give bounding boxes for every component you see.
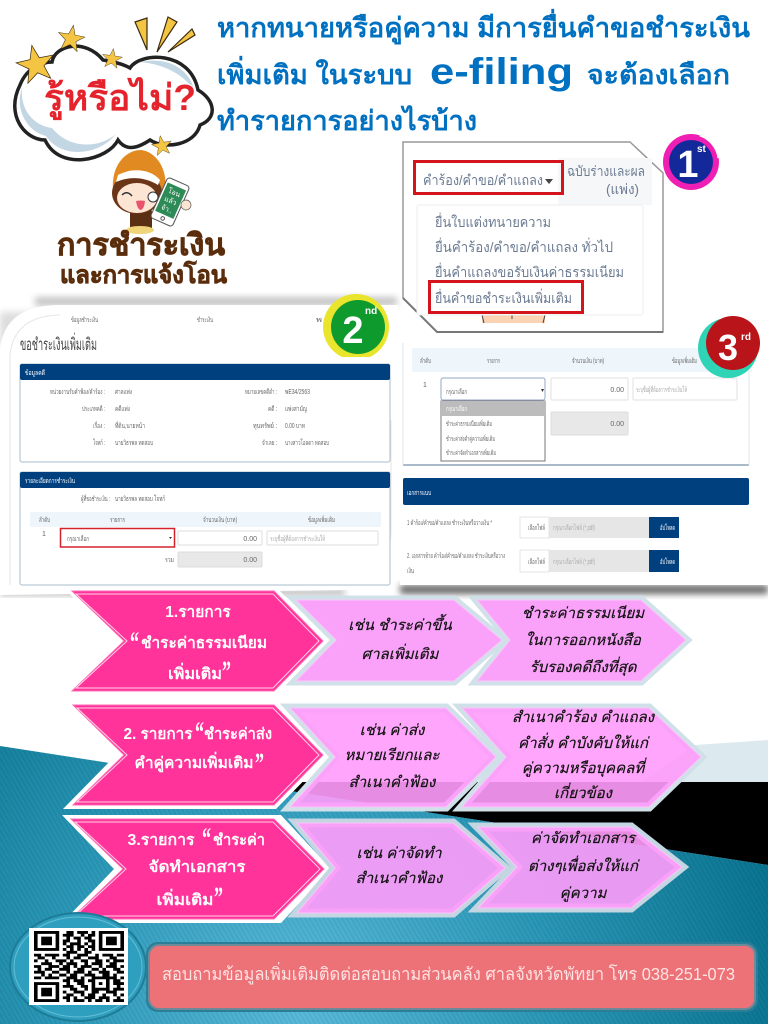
arrow row 2: ชำระค่าส่ง bbox=[204, 725, 272, 743]
icon: step 1 badge: 1 bbox=[677, 144, 699, 186]
arrow row 3: เช่น ค่าจัดทำ bbox=[356, 845, 442, 862]
callout: contact information: สอบถามข้อมูลเพิ่มเติมติดต่อสอบถามส่วนคลัง ศาลจังหวัดพัทยา โทร 038-251-073 bbox=[162, 962, 735, 985]
panel: step 2 form screenshot: ที่ดิน,นายหน้า bbox=[115, 421, 145, 430]
icon: step 2 badge bbox=[323, 294, 389, 360]
arrow row 3 bbox=[62, 815, 682, 923]
arrow row 3: ” bbox=[214, 881, 223, 914]
panel: step 3 form screenshot: กรุณาเลือกไฟล์ (*.pdf) bbox=[553, 523, 595, 532]
heading: payment and transfer notice bbox=[57, 229, 228, 289]
arrow row 1: ศาลเพิ่มเติม bbox=[362, 643, 440, 663]
panel: step 2 form screenshot: ประเภทคดี : bbox=[82, 405, 105, 413]
panel: step 3 form screenshot bbox=[400, 343, 768, 585]
arrow row 3: ค่าจัดทำเอกสาร bbox=[531, 830, 637, 847]
arrow row 2: 2. รายการ bbox=[124, 726, 193, 743]
arrow row 1: ” bbox=[222, 655, 231, 688]
panel: step 2 form screenshot bbox=[0, 305, 398, 595]
panel: step 1 menu screenshot: คำร้อง/คำขอ/คำแถลง bbox=[423, 172, 543, 188]
badge: did you know cloud: รู้หรือไม่? bbox=[44, 76, 196, 121]
arrow row 2: คำสั่ง คำบังคับให้แก่ bbox=[518, 732, 650, 752]
panel: step 2 form screenshot: คดี : bbox=[268, 405, 277, 413]
icon: step 2 badge: nd bbox=[365, 306, 377, 317]
arrow row 2: คู่ความหรือบุคคลที่ bbox=[522, 757, 647, 777]
arrow row 3: คู่ความ bbox=[560, 885, 608, 902]
arrow row 3: “ bbox=[202, 822, 211, 855]
arrow row 3: สำเนาคำฟ้อง bbox=[356, 870, 444, 887]
title: question heading: e-filing bbox=[430, 51, 573, 92]
panel: step 3 form screenshot: 0.00 bbox=[610, 387, 624, 394]
panel: step 2 form screenshot: แพ่งสามัญ bbox=[285, 405, 307, 413]
panel: step 2 form screenshot: ศาลแพ่ง bbox=[115, 389, 132, 396]
arrow row 2: ” bbox=[255, 747, 264, 780]
panel: step 3 form screenshot: เอกสารแนบ bbox=[407, 490, 431, 497]
panel: step 3 form screenshot: ลำดับ bbox=[420, 357, 431, 365]
panel: step 3 form screenshot: กรุณาเลือก bbox=[446, 388, 467, 396]
panel: step 2 form screenshot: นายวิธรพล ทดสอบ bbox=[115, 439, 153, 447]
panel: step 2 form screenshot: ลำดับ bbox=[39, 516, 50, 524]
panel: step 2 form screenshot: รวม bbox=[165, 557, 174, 564]
panel: step 3 form screenshot: อัปโหลด bbox=[660, 557, 675, 566]
icon: cartoon girl holding phone: โอน bbox=[167, 186, 182, 199]
icon: step 2 badge: 2 bbox=[342, 310, 364, 352]
panel: step 2 form screenshot: คดีแพ่ง bbox=[115, 405, 130, 413]
panel: step 1 menu screenshot: ยื่นคำขอชำระเงินเพิ่มเติม bbox=[435, 289, 572, 306]
panel: step 2 form screenshot: 0.00 bbox=[243, 536, 257, 543]
panel: step 2 form screenshot: ระบุชื่อผู้ที่ต้องการชำระเงินให้ bbox=[270, 534, 325, 543]
panel: step 2 form screenshot: หน่วยงานรับคำฟ้อง/คำร้อง : bbox=[50, 388, 105, 396]
arrow row 1: ชำระค่าธรรมเนียม bbox=[141, 634, 267, 652]
arrow row 2: สำเนาคำฟ้อง bbox=[349, 774, 437, 791]
panel: step 3 form screenshot: ระบุชื่อผู้ที่ต้องการชำระเงินให้ bbox=[636, 385, 687, 394]
arrow row 3: จัดทำเอกสาร bbox=[148, 858, 246, 876]
arrow row 3: ต่างๆเพื่อส่งให้แก่ bbox=[528, 855, 640, 875]
arrow row 3: ชำระค่า bbox=[213, 831, 265, 849]
arrow row 1: “ bbox=[130, 626, 139, 659]
icon: cartoon girl holding phone: จ้า.. bbox=[160, 203, 174, 215]
panel: step 2 form screenshot: จำนวนเงิน (บาท) bbox=[203, 516, 237, 524]
icon: QR code in circle bbox=[10, 913, 146, 1021]
panel: step 2 form screenshot: นายวิธรพล ทดสอบ โจทก์ bbox=[115, 494, 165, 503]
panel: step 3 form screenshot: ชำระค่าส่งคำคู่ความเพิ่มเติม bbox=[446, 434, 495, 443]
panel shadow: screenshots bbox=[0, 297, 768, 595]
panel: step 2 form screenshot: กรุณาเลือก bbox=[67, 535, 89, 543]
panel: step 2 form screenshot: ผู้ที่ขอชำระเงิน : bbox=[81, 494, 110, 503]
panel: step 2 form screenshot: 0.00 บาท bbox=[285, 423, 305, 430]
panel: step 3 form screenshot: เงิน bbox=[407, 567, 414, 575]
callout: contact information bbox=[146, 942, 758, 1012]
panel: step 2 form screenshot: พ bbox=[316, 317, 322, 324]
title: question heading: เพิ่มเติม ในระบบ bbox=[217, 55, 412, 90]
arrow row 2: คำคู่ความเพิ่มเติม bbox=[134, 751, 254, 774]
panel: step 3 form screenshot: ชำระค่าจัดทำเอกสารเพิ่มเติม bbox=[446, 448, 496, 457]
panel: step 2 form screenshot: จำเลย : bbox=[262, 439, 277, 447]
panel: step 3 form screenshot: เลือกไฟล์ bbox=[528, 523, 545, 532]
panel: step 3 form screenshot: 1 bbox=[423, 382, 427, 389]
icon: step 3 badge: 3 bbox=[718, 327, 738, 368]
panel: step 2 form screenshot: 0.00 bbox=[243, 557, 257, 564]
arrow row 1: เช่น ชำระค่าขึ้น bbox=[348, 614, 452, 634]
panel: step 3 form screenshot: ชำระค่าธรรมเนียมเพิ่มเติม bbox=[446, 419, 492, 428]
panel: step 2 form screenshot: รายการ bbox=[110, 517, 125, 524]
panel: step 2 form screenshot: ทุนทรัพย์ : bbox=[253, 422, 277, 430]
panel: step 3 form screenshot: รายการ bbox=[487, 358, 500, 365]
arrow row 2: “ bbox=[195, 716, 204, 749]
arrow row 2: เกี่ยวข้อง bbox=[554, 782, 614, 802]
panel: step 3 form screenshot: จำนวนเงิน (บาท) bbox=[572, 357, 604, 365]
panel: step 2 form screenshot: ข้อมูลคดี bbox=[25, 369, 45, 377]
panel: step 2 form screenshot: 1 bbox=[42, 531, 46, 538]
arrow row 1 bbox=[63, 587, 686, 695]
panel: step 3 form screenshot: เลือกไฟล์ bbox=[528, 557, 545, 566]
arrow row 2: เช่น ค่าส่ง bbox=[360, 722, 426, 739]
panel: step 1 menu screenshot bbox=[403, 142, 663, 332]
panel: step 2 form screenshot: หมายเลขคดีดำ : bbox=[245, 388, 277, 396]
panel: step 2 form screenshot: ข้อมูลชำระเงิน bbox=[71, 316, 98, 324]
arrow row 3: เพิ่มเติม bbox=[156, 888, 214, 909]
panel: step 3 form screenshot: 0.00 bbox=[610, 421, 624, 428]
panel: step 1 menu screenshot: ยื่นใบแต่งทนายความ bbox=[435, 213, 551, 230]
title: question heading bbox=[217, 8, 751, 136]
arrow row 2: หมายเรียกและ bbox=[345, 747, 440, 764]
arrow row 1: รับรองคดีถึงที่สุด bbox=[530, 656, 638, 676]
panel: step 1 menu screenshot: ยื่นคำแถลงขอรับเงินค่าธรรมเนียม bbox=[435, 263, 624, 280]
arrow row 1: ชำระค่าธรรมเนียม bbox=[522, 605, 645, 622]
title: question heading: จะต้องเลือก bbox=[587, 60, 730, 90]
panel: step 1 menu screenshot: ยื่นคำร้อง/คำขอ/คำแถลง ทั่วไป bbox=[435, 238, 613, 255]
icon: step 1 badge bbox=[663, 134, 719, 190]
heading: payment and transfer notice: และการแจ้งโอน bbox=[60, 260, 228, 289]
icon: cartoon girl holding phone: แล้ว bbox=[163, 195, 178, 207]
title: question heading: หากทนายหรือคู่ความ มีการยื่นคำขอชำระเงิน bbox=[217, 8, 751, 45]
panel: step 2 form screenshot: พE34/2563 bbox=[285, 389, 310, 396]
panel: step 3 form screenshot: 2. เอกสารท้าย คำร้อง/คำขอ/คำแถลง ชำระเงินหรือวาง bbox=[407, 552, 505, 560]
panel: step 3 form screenshot: กรุณาเลือก bbox=[446, 405, 467, 413]
panel: step 2 form screenshot: โจทก์ : bbox=[93, 438, 105, 447]
badge: did you know cloud bbox=[13, 17, 212, 160]
title: question heading: ทำรายการอย่างไรบ้าง bbox=[217, 105, 477, 136]
arrow row 1: เพิ่มเติม bbox=[168, 662, 222, 683]
panel: step 3 form screenshot: กรุณาเลือกไฟล์ (*.pdf) bbox=[553, 557, 595, 566]
panel: step 2 form screenshot: นางสาวโอลดา ทดสอบ bbox=[285, 438, 329, 447]
panel: step 2 form screenshot: ข้อมูลเพิ่มเติม bbox=[308, 515, 335, 524]
panel: step 1 menu screenshot: ฉบับร่างและผล bbox=[567, 163, 645, 179]
icon: step 3 badge bbox=[698, 316, 760, 378]
icon: step 3 badge: rd bbox=[741, 332, 751, 343]
arrow row 1: ในการออกหนังสือ bbox=[525, 631, 642, 649]
panel: step 3 form screenshot: ข้อมูลเพิ่มเติม bbox=[672, 356, 697, 365]
panel: step 3 form screenshot: 1 คำร้อง/คำขอ/คำแถลง ชำระเงินหรือวางเงิน * bbox=[407, 519, 492, 527]
arrow row 2: สำเนาคำร้อง คำแถลง bbox=[512, 709, 656, 726]
panel: step 2 form screenshot: เรื่อง : bbox=[93, 421, 105, 430]
arrow row 1: 1.รายการ bbox=[165, 604, 231, 621]
heading: payment and transfer notice: การชำระเงิน bbox=[57, 229, 225, 262]
panel: step 3 form screenshot: อัปโหลด bbox=[660, 523, 675, 532]
panel: step 2 form screenshot: ชำระเงิน bbox=[197, 316, 213, 324]
arrow row 3: 3.รายการ bbox=[128, 832, 195, 849]
panel: step 2 form screenshot: รายละเอียดการชำระเงิน bbox=[25, 477, 75, 485]
panel: step 1 menu screenshot: (แพ่ง) bbox=[606, 181, 639, 197]
icon: cartoon girl holding phone bbox=[112, 150, 191, 234]
icon: step 1 badge: st bbox=[697, 144, 707, 155]
panel: step 2 form screenshot: ขอชำระเงินเพิ่มเติม bbox=[20, 332, 97, 354]
arrow row 2 bbox=[63, 701, 701, 809]
